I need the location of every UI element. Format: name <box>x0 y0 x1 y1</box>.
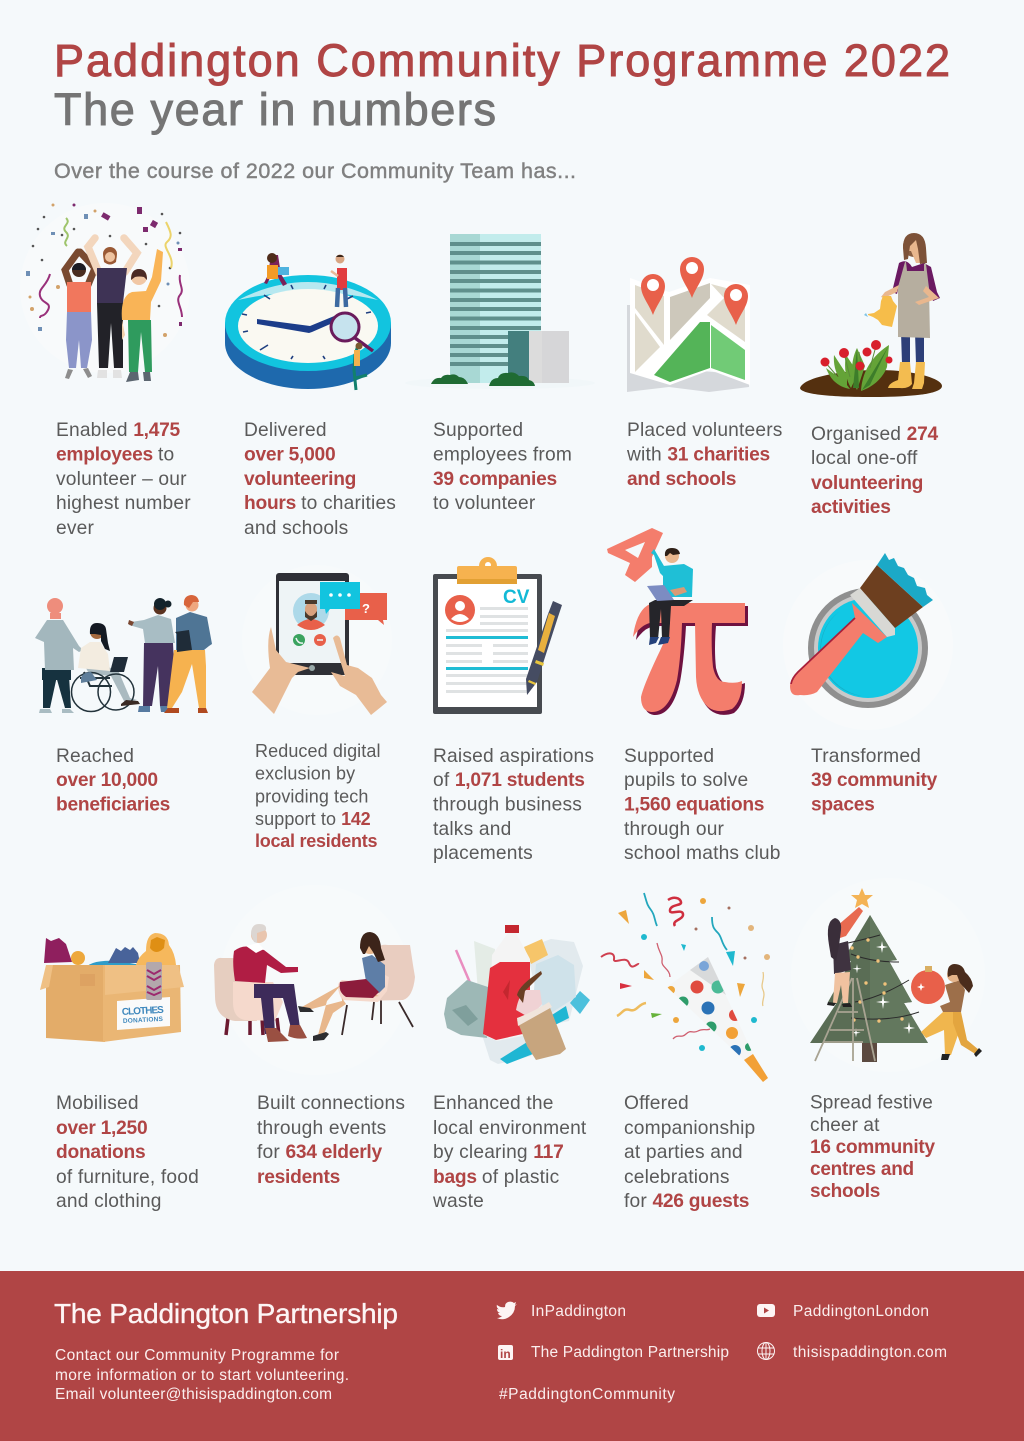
text: 1,250 donations: and clothing <box>56 1191 162 1212</box>
panel: companies <box>405 234 595 514</box>
icon: paint tin and brush <box>783 553 953 730</box>
text: 142 local residents: support to <box>255 809 341 829</box>
website: thisispaddington.com <box>793 1344 947 1361</box>
icon: globe <box>758 1342 774 1360</box>
icon: clothes donation box: CLOTHES <box>122 1005 164 1018</box>
icon: pile of plastic waste <box>444 925 590 1064</box>
linkedin name: The Paddington Partnership <box>531 1344 729 1361</box>
text: 39 companies: employees from <box>433 444 572 466</box>
left woman <box>65 252 95 285</box>
youtube name: PaddingtonLondon <box>793 1303 929 1320</box>
text: 1,560 equations: 1,560 equations <box>624 794 764 816</box>
text: 10,000 beneficiaries: Reached <box>56 746 134 767</box>
panel: volunteering hours <box>225 253 396 539</box>
icon: linkedin <box>498 1345 513 1361</box>
contact text line 1: Contact our Community Programme for <box>55 1347 339 1364</box>
text: 1,250 donations: of furniture, food <box>56 1167 199 1188</box>
text: 117 bags: of plastic <box>482 1167 560 1188</box>
text: 39 companies: to volunteer <box>433 493 536 514</box>
text: 5,000 hours: and schools <box>244 518 348 539</box>
text: 16 community centres: cheer at <box>810 1115 880 1136</box>
text: 1,560 equations: school maths club <box>624 843 781 864</box>
icon: clipboard CV and pen <box>433 557 562 714</box>
seated woman with laptop <box>264 255 287 286</box>
subtitle: the year in numbers: The year in numbers <box>54 84 496 135</box>
text: 1,475 employees: to <box>158 444 174 466</box>
icon: christmas tree, ladder, bauble <box>791 878 985 1072</box>
text: 39 community spaces: 39 community <box>811 770 938 791</box>
panel: students <box>433 557 594 864</box>
text: 634 elderly residents: Built connections <box>257 1093 405 1114</box>
text: 634 elderly residents: for <box>257 1142 285 1163</box>
text: 1,475 employees: highest number <box>56 493 191 514</box>
text: 1,475 employees: Enabled <box>56 420 133 441</box>
panel: maths club <box>607 528 781 864</box>
icon: twitter <box>497 1302 517 1319</box>
icon: clipboard CV and pen: CV <box>503 587 530 608</box>
twitter handle: InPaddington <box>531 1303 626 1320</box>
speech bubble: question <box>345 593 387 625</box>
panel: plastic waste <box>432 925 590 1212</box>
contact text line 3: Email volunteer@thisispaddington.com <box>55 1386 332 1403</box>
panel: festive cheer <box>791 878 985 1202</box>
text: 1,475 employees: 1,475 <box>133 420 181 441</box>
text: 5,000 hours: to charities <box>301 493 396 514</box>
text: 1,560 equations: through our <box>624 819 725 840</box>
text: 1,250 donations: over 1,250 <box>56 1118 147 1139</box>
text: 142 local residents: local residents <box>255 831 378 851</box>
text: 1,071 students: of <box>433 770 455 791</box>
icon: youtube <box>757 1304 775 1317</box>
text: 634 elderly residents: 634 elderly <box>285 1142 382 1163</box>
panel: elderly residents <box>214 885 415 1188</box>
title: Paddington Community Programme 2022 <box>54 35 950 86</box>
text: 31 charities: and schools <box>627 469 736 490</box>
text: 1,475 employees: ever <box>56 518 94 539</box>
footer logo text: The Paddington Partnership <box>54 1298 398 1329</box>
icon: linkedin: in <box>500 1347 511 1361</box>
panel: donations <box>40 933 199 1212</box>
intro sentence: Over the course of 2022 our Community Team has... <box>54 159 576 183</box>
text: 1,250 donations: Mobilised <box>56 1093 139 1114</box>
text: 117 bags: waste <box>432 1191 484 1212</box>
text: 274 activities: Organised <box>811 424 907 445</box>
icon: clothes donation box <box>40 933 184 1042</box>
text: 5,000 hours: hours <box>244 493 301 514</box>
text: 10,000 beneficiaries: beneficiaries <box>56 794 170 816</box>
text: 16 community centres: schools <box>810 1181 880 1202</box>
text: 274 activities: local one-off <box>811 448 918 469</box>
text: 5,000 hours: over 5,000 <box>244 444 335 466</box>
text: 16 community centres: 16 community <box>810 1137 935 1158</box>
standing man <box>337 268 347 290</box>
text: 39 community spaces: Transformed <box>811 746 921 767</box>
text: 426 guests: celebrations <box>624 1167 730 1188</box>
text: 5,000 hours: Delivered <box>244 420 327 441</box>
icon: pi symbol with person and number four <box>607 528 748 715</box>
text: 1,071 students: Raised aspirations <box>433 746 594 767</box>
text: 142 local residents: providing tech <box>255 786 368 806</box>
text: 1,560 equations: pupils to solve <box>624 770 748 791</box>
text: 426 guests: companionship <box>624 1118 755 1139</box>
panel: employees volunteering <box>20 203 191 539</box>
icon: party popper and confetti <box>601 893 770 1082</box>
text: 117 bags: local environment <box>433 1118 587 1139</box>
right woman <box>122 249 163 320</box>
text: 1,250 donations: donations <box>56 1142 145 1163</box>
text: 142 local residents: Reduced digital <box>255 741 381 761</box>
text: 39 companies: Supported <box>433 420 523 441</box>
icon: office tower <box>405 234 595 389</box>
text: 16 community centres: Spread festive <box>810 1092 933 1114</box>
footer panel <box>0 1271 1024 1441</box>
text: 5,000 hours: volunteering <box>244 469 356 490</box>
text: 426 guests: for <box>624 1191 652 1212</box>
text: 142 local residents: exclusion by <box>255 764 355 784</box>
text: 274 activities: 274 <box>907 424 939 445</box>
text: 426 guests: 426 guests <box>652 1191 749 1212</box>
icon: tablet with video call and hands <box>242 565 392 715</box>
text: 426 guests: Offered <box>624 1093 689 1114</box>
text: 1,560 equations: Supported <box>624 746 714 767</box>
centre man <box>88 238 137 273</box>
icon: two people in armchairs talking <box>214 885 415 1075</box>
text: 31 charities: with <box>626 444 667 466</box>
text: 426 guests: at parties and <box>624 1142 743 1163</box>
contact text line 2: more information or to start volunteering. <box>55 1367 349 1384</box>
icon: clothes donation box: DONATIONS <box>123 1016 164 1025</box>
text: 634 elderly residents: through events <box>257 1118 386 1139</box>
text: 39 community spaces: spaces <box>811 794 875 816</box>
icon: celebrating people with confetti <box>20 203 190 382</box>
text: 117 bags: Enhanced the <box>433 1093 554 1114</box>
text: 117 bags: 117 <box>533 1142 564 1163</box>
text: 1,071 students: placements <box>433 843 533 864</box>
text: 39 companies: 39 companies <box>433 469 557 490</box>
text: 1,071 students: talks and <box>433 819 511 840</box>
text: 1,071 students: through business <box>433 794 582 816</box>
panel: digital exclusion <box>242 565 392 851</box>
text: 634 elderly residents: residents <box>257 1167 340 1188</box>
text: 1,071 students: 1,071 students <box>455 770 585 791</box>
panel: parties and celebrations <box>601 893 770 1212</box>
text: 1,475 employees: volunteer – our <box>56 469 187 490</box>
icon: giant clock with small people <box>225 253 391 390</box>
text: 142 local residents: 142 <box>341 809 371 829</box>
hashtag: #PaddingtonCommunity <box>499 1386 675 1403</box>
text: 31 charities: Placed volunteers <box>627 420 783 441</box>
icon: diverse group with wheelchair user <box>35 595 212 713</box>
speech bubble: typing <box>320 582 360 614</box>
panel: charities and schools <box>626 257 783 490</box>
text: 31 charities: 31 charities <box>667 444 770 466</box>
text: 10,000 beneficiaries: over 10,000 <box>56 770 158 791</box>
text: 16 community centres: centres and <box>810 1159 914 1180</box>
text: 117 bags: by clearing <box>433 1142 533 1163</box>
icon: folded map with pins <box>627 257 750 392</box>
map pins <box>641 257 748 325</box>
text: 274 activities: activities <box>811 497 891 518</box>
panel: beneficiaries <box>35 595 212 816</box>
speech bubble: question: ? <box>362 601 370 616</box>
text: 117 bags: bags <box>433 1167 482 1188</box>
text: 1,475 employees: employees <box>56 444 158 466</box>
panel: community spaces <box>783 553 953 816</box>
icon: gardener watering flowers <box>800 233 942 397</box>
text: 274 activities: volunteering <box>811 473 923 494</box>
panel: one-off activities <box>800 233 942 518</box>
